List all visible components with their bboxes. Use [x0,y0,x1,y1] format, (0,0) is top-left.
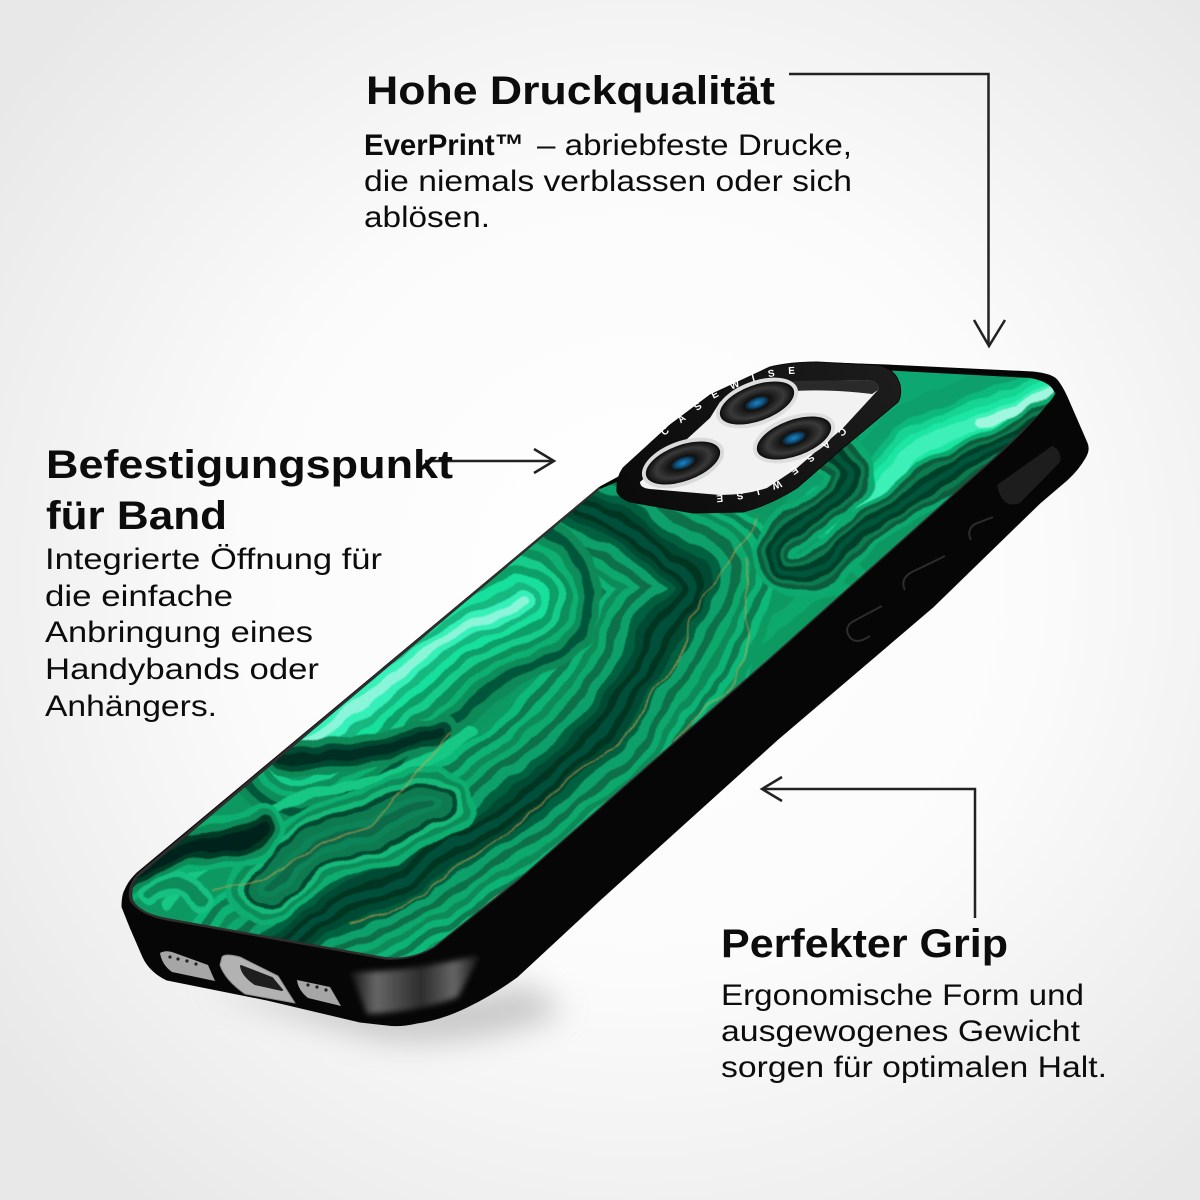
heading: grip: Perfekter Grip [721,922,1008,966]
right V ribbon [769,405,1080,574]
speaker holes [168,955,328,992]
dark wedge under arch [280,735,440,758]
marbled bands [132,370,1055,958]
malachite screen [132,370,1055,958]
rim lettering top: CASEWISE [662,366,795,435]
recess shadow [745,380,878,394]
dark wedge lower left [130,832,260,880]
lens left [635,428,731,498]
thin vein ribbon [744,664,752,680]
text: print quality: EverPrint™ [364,129,524,162]
phone shadow [200,985,565,1042]
arrow: print quality [789,74,1005,346]
side buttons [847,517,993,641]
arrow: grip [762,777,975,918]
text: grip: Ergonomische Form und [721,979,1084,1012]
text: strap anchor: Integrierte Öffnung für [45,543,382,576]
text: strap anchor: Handybands oder [45,653,319,686]
speaker right [297,980,341,1006]
text: grip: ausgewogenes Gewicht [721,1015,1081,1048]
case edge highlight [130,392,1055,958]
rim lettering bottom: CASEWISE [716,428,846,502]
side bump [997,446,1060,505]
camera recess [640,380,878,495]
bright arch swirl [300,598,520,745]
lens top [709,368,805,438]
bright corner curl [150,888,205,905]
text: grip [721,979,1107,1084]
text: grip: sorgen für optimalen Halt. [721,1051,1107,1084]
text: strap anchor: Anbringung eines [45,616,313,649]
heading: strap anchor [46,443,453,538]
bright vein left [170,730,470,905]
text: strap anchor: die einfache [45,580,233,613]
lens shape [265,805,430,885]
arrow: strap anchor [425,449,554,473]
text: strap anchor [45,543,382,723]
heading: strap anchor: Befestigungspunkt [46,443,453,487]
speaker left [160,951,215,981]
text: strap anchor: Anhängers. [45,690,217,723]
camera module [616,362,902,514]
text: print quality [364,129,852,234]
lens right [746,403,842,473]
phone case with malachite design [122,362,1089,1026]
lower edge ribbon [762,564,865,644]
camera rim [617,362,901,513]
case body [122,363,1088,1026]
text: print quality: ablösen. [364,201,490,234]
usb port [220,955,295,1003]
heading: strap anchor: für Band [46,494,227,538]
central dark ribbon [250,495,697,975]
gold veins [215,520,753,945]
heading: print quality: Hohe Druckqualität [366,69,775,113]
text: print quality: die niemals verblassen oder sich [364,165,852,198]
top right green field [832,385,1070,512]
text: print quality: – abriebfeste Drucke, [537,129,852,162]
corner sheen [350,955,480,1014]
